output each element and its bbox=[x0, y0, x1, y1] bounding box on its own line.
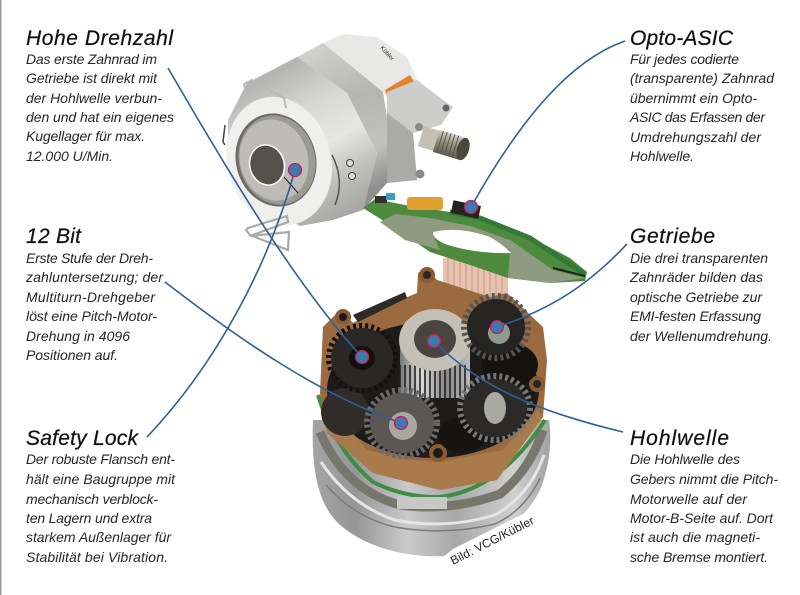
text block: Hohlwelle: Hohlwelle bbox=[630, 427, 729, 450]
text block: Hohe Drehzahl: Getriebe ist direkt mit bbox=[26, 70, 158, 86]
text block: Safety Lock: Stabilität bei Vibration. bbox=[26, 549, 168, 565]
text block: Hohlwelle: ist auch die magneti- bbox=[630, 529, 760, 545]
text block: Opto-ASIC: Hohlwelle. bbox=[630, 148, 694, 164]
credit: Bild: VCG/Kübler bbox=[448, 513, 536, 568]
text block: 12 Bit: Positionen auf. bbox=[26, 347, 118, 363]
text block: 12 Bit: 12 Bit bbox=[26, 225, 82, 248]
marker dots bbox=[288, 164, 504, 430]
photo: assembled encoder bbox=[212, 34, 472, 250]
text block: Hohe Drehzahl: Kugellager für max. bbox=[26, 128, 145, 144]
text block: Opto-ASIC: Opto-ASIC bbox=[630, 27, 734, 50]
text block: Getriebe: EMI-festen Erfassung bbox=[630, 308, 761, 324]
text block: Hohe Drehzahl: 12.000 U/Min. bbox=[26, 148, 113, 164]
text block: Opto-ASIC: übernimmt ein Opto- bbox=[630, 90, 757, 106]
text block: Hohe Drehzahl: der Hohlwelle verbun- bbox=[26, 90, 162, 106]
text block: Getriebe bbox=[629, 225, 772, 344]
text block: Safety Lock: mechanisch verblock- bbox=[26, 491, 158, 507]
leader lines bbox=[147, 41, 627, 437]
photo: opened gear assembly bbox=[313, 267, 560, 595]
text block: Hohlwelle: Motorwelle auf der bbox=[630, 491, 748, 507]
text block: Safety Lock: Safety Lock bbox=[26, 427, 140, 450]
text block: Opto-ASIC: ASIC das Erfassen der bbox=[629, 109, 766, 125]
photo: assembled encoder: Kübler bbox=[379, 45, 395, 62]
text block: Safety Lock bbox=[26, 427, 176, 565]
text block: Hohe Drehzahl: Hohe Drehzahl bbox=[26, 27, 174, 50]
text block: Safety Lock: starkem Außenlager für bbox=[26, 529, 172, 545]
text block: Getriebe: Zahnräder bilden das bbox=[629, 269, 763, 285]
text block: Getriebe: Die drei transparenten bbox=[630, 250, 768, 266]
text block: 12 Bit: Drehung in 4096 bbox=[26, 328, 130, 344]
text block: Getriebe: der Wellenumdrehung. bbox=[630, 328, 772, 344]
photo: circuit board with Opto-ASIC bbox=[363, 193, 587, 300]
text block: Opto-ASIC: (transparente) Zahnrad bbox=[630, 70, 775, 86]
text block: Opto-ASIC: Für jedes codierte bbox=[630, 51, 739, 67]
text block: 12 Bit bbox=[25, 225, 164, 363]
text block: Opto-ASIC bbox=[629, 27, 775, 164]
text block: 12 Bit: Erste Stufe der Dreh- bbox=[26, 250, 153, 266]
text block: Hohlwelle: sche Bremse montiert. bbox=[630, 549, 768, 565]
text block: Opto-ASIC: Umdrehungszahl der bbox=[630, 129, 762, 145]
text block: Safety Lock: ten Lagern und extra bbox=[26, 510, 152, 526]
text block: Hohe Drehzahl: Das erste Zahnrad im bbox=[26, 51, 157, 67]
text block: Hohe Drehzahl bbox=[26, 27, 174, 164]
text block: Hohlwelle bbox=[630, 427, 778, 565]
text block: 12 Bit: löst eine Pitch-Motor- bbox=[26, 308, 157, 324]
text block: Hohlwelle: Die Hohlwelle des bbox=[630, 451, 740, 467]
text block: Safety Lock: Der robuste Flansch ent- bbox=[26, 451, 175, 467]
text block: Getriebe: optische Getriebe zur bbox=[630, 289, 763, 305]
text block: Hohlwelle: Motor-B-Seite auf. Dort bbox=[630, 510, 774, 526]
text block: 12 Bit: zahluntersetzung; der bbox=[25, 269, 164, 285]
text block: Hohe Drehzahl: den und hat ein eigenes bbox=[26, 109, 174, 125]
text block: Hohlwelle: Gebers nimmt die Pitch- bbox=[630, 471, 778, 487]
text block: Getriebe: Getriebe bbox=[630, 225, 715, 248]
text block: Safety Lock: hält eine Baugruppe mit bbox=[26, 471, 176, 487]
text block: 12 Bit: Multiturn-Drehgeber bbox=[26, 289, 156, 305]
